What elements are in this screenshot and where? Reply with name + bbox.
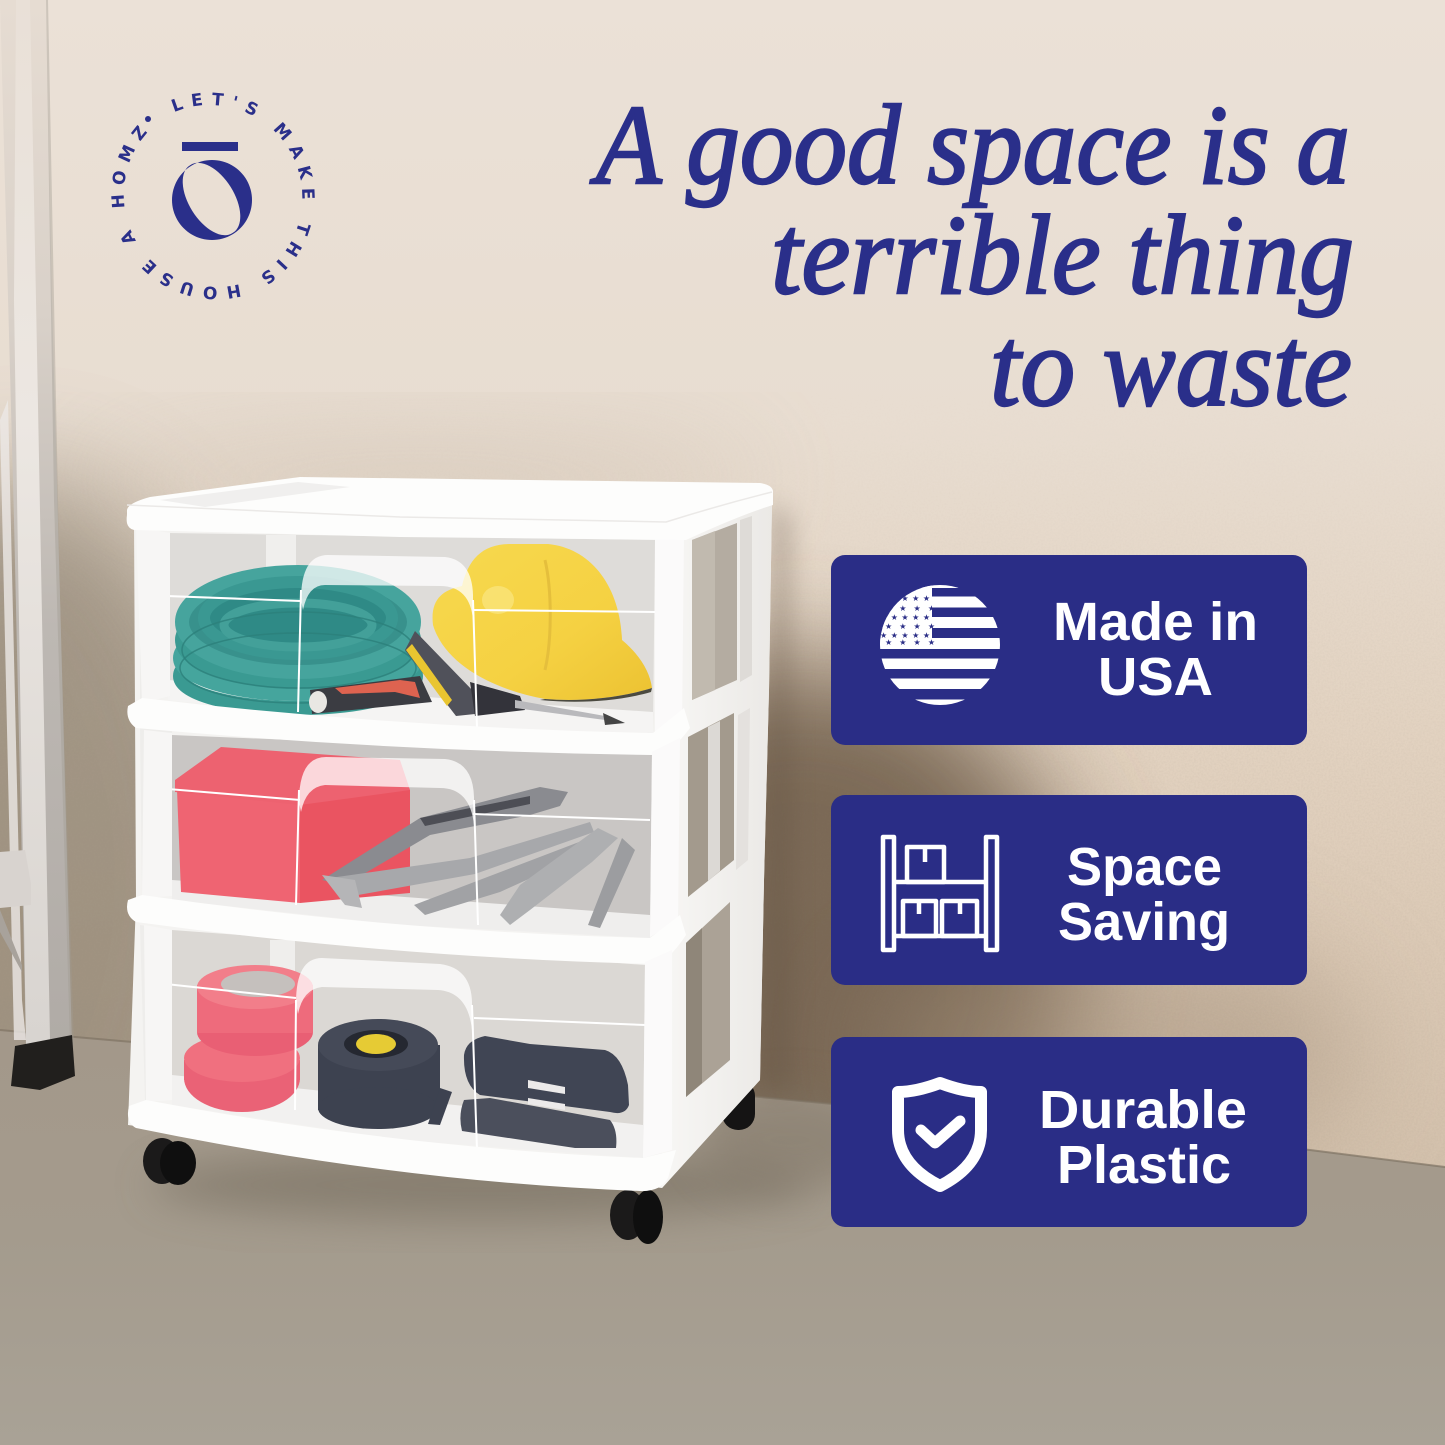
caster: front right — [610, 1190, 663, 1244]
red box — [175, 747, 410, 903]
label: Durable — [1039, 1080, 1247, 1140]
headline: to waste — [990, 305, 1352, 430]
drawer 2 front clear panel — [144, 787, 300, 800]
logo ring text: LET'S MAKE THIS HOUSE A HOMZ — [111, 92, 315, 300]
cart shadow on wall — [760, 500, 792, 1090]
side window: drawer 3 — [686, 902, 730, 1097]
drawer 3 interior — [172, 930, 645, 1155]
label: USA — [1098, 647, 1213, 707]
icon: american flag: ★ ★ ★ ★ ★ — [880, 631, 930, 640]
icon: american flag: ★ ★ ★ ★ — [885, 622, 935, 631]
red tape rolls — [184, 965, 313, 1112]
badge: made in USA — [831, 555, 1307, 745]
label — [1039, 1080, 1247, 1195]
side window: drawer 1 — [692, 523, 737, 700]
logo dot — [145, 116, 151, 122]
drawer 1 front clear panel — [140, 595, 300, 601]
icon: american flag — [880, 585, 1000, 706]
headline — [589, 83, 1354, 430]
screwdriver — [405, 631, 625, 725]
logo mark: o with macron — [172, 142, 252, 240]
flashlight — [309, 676, 432, 714]
hard hat — [433, 544, 652, 702]
caster: front left — [143, 1138, 196, 1185]
headline: A good space is a — [589, 83, 1350, 208]
lid — [127, 477, 773, 540]
label: Made in — [1053, 592, 1258, 652]
icon: american flag: ★ ★ ★ ★ ★ — [880, 594, 930, 603]
drawer 2 interior — [172, 735, 652, 935]
background: floor — [0, 1030, 1445, 1445]
step ladder — [0, 0, 75, 1090]
black tape roll — [318, 1019, 452, 1129]
storage cart — [127, 477, 792, 1244]
label: Plastic — [1057, 1135, 1231, 1195]
pliers and wrenches — [322, 787, 635, 928]
logo — [111, 92, 315, 300]
hose — [180, 572, 416, 708]
icon: american flag: ★ ★ ★ ★ — [885, 638, 935, 647]
drawer 2 handle — [296, 757, 478, 925]
drawer 1 interior — [168, 533, 655, 733]
label — [1053, 592, 1258, 707]
headline: terrible thing — [771, 193, 1354, 318]
label: Space — [1067, 837, 1222, 897]
caster: back right — [722, 1080, 755, 1130]
drawer 3 handle — [295, 958, 477, 1150]
icon: shelf with boxes — [883, 837, 997, 950]
cart body and right side — [128, 500, 772, 1188]
badge: space saving — [831, 795, 1307, 985]
badge: durable plastic — [831, 1037, 1307, 1227]
side window: drawer 2 — [688, 713, 734, 897]
drawer front lips — [136, 527, 170, 703]
icon: shield with check — [898, 1083, 981, 1186]
drawer 3 front clear panel — [147, 982, 296, 998]
label: Saving — [1058, 892, 1230, 952]
drawer 1 handle — [298, 555, 477, 728]
label — [1058, 837, 1230, 952]
icon: american flag: ★ ★ ★ ★ — [885, 604, 935, 613]
ladder foot — [11, 1035, 75, 1090]
icon: american flag: ★ ★ ★ ★ ★ — [880, 613, 930, 622]
black case — [460, 1036, 629, 1148]
